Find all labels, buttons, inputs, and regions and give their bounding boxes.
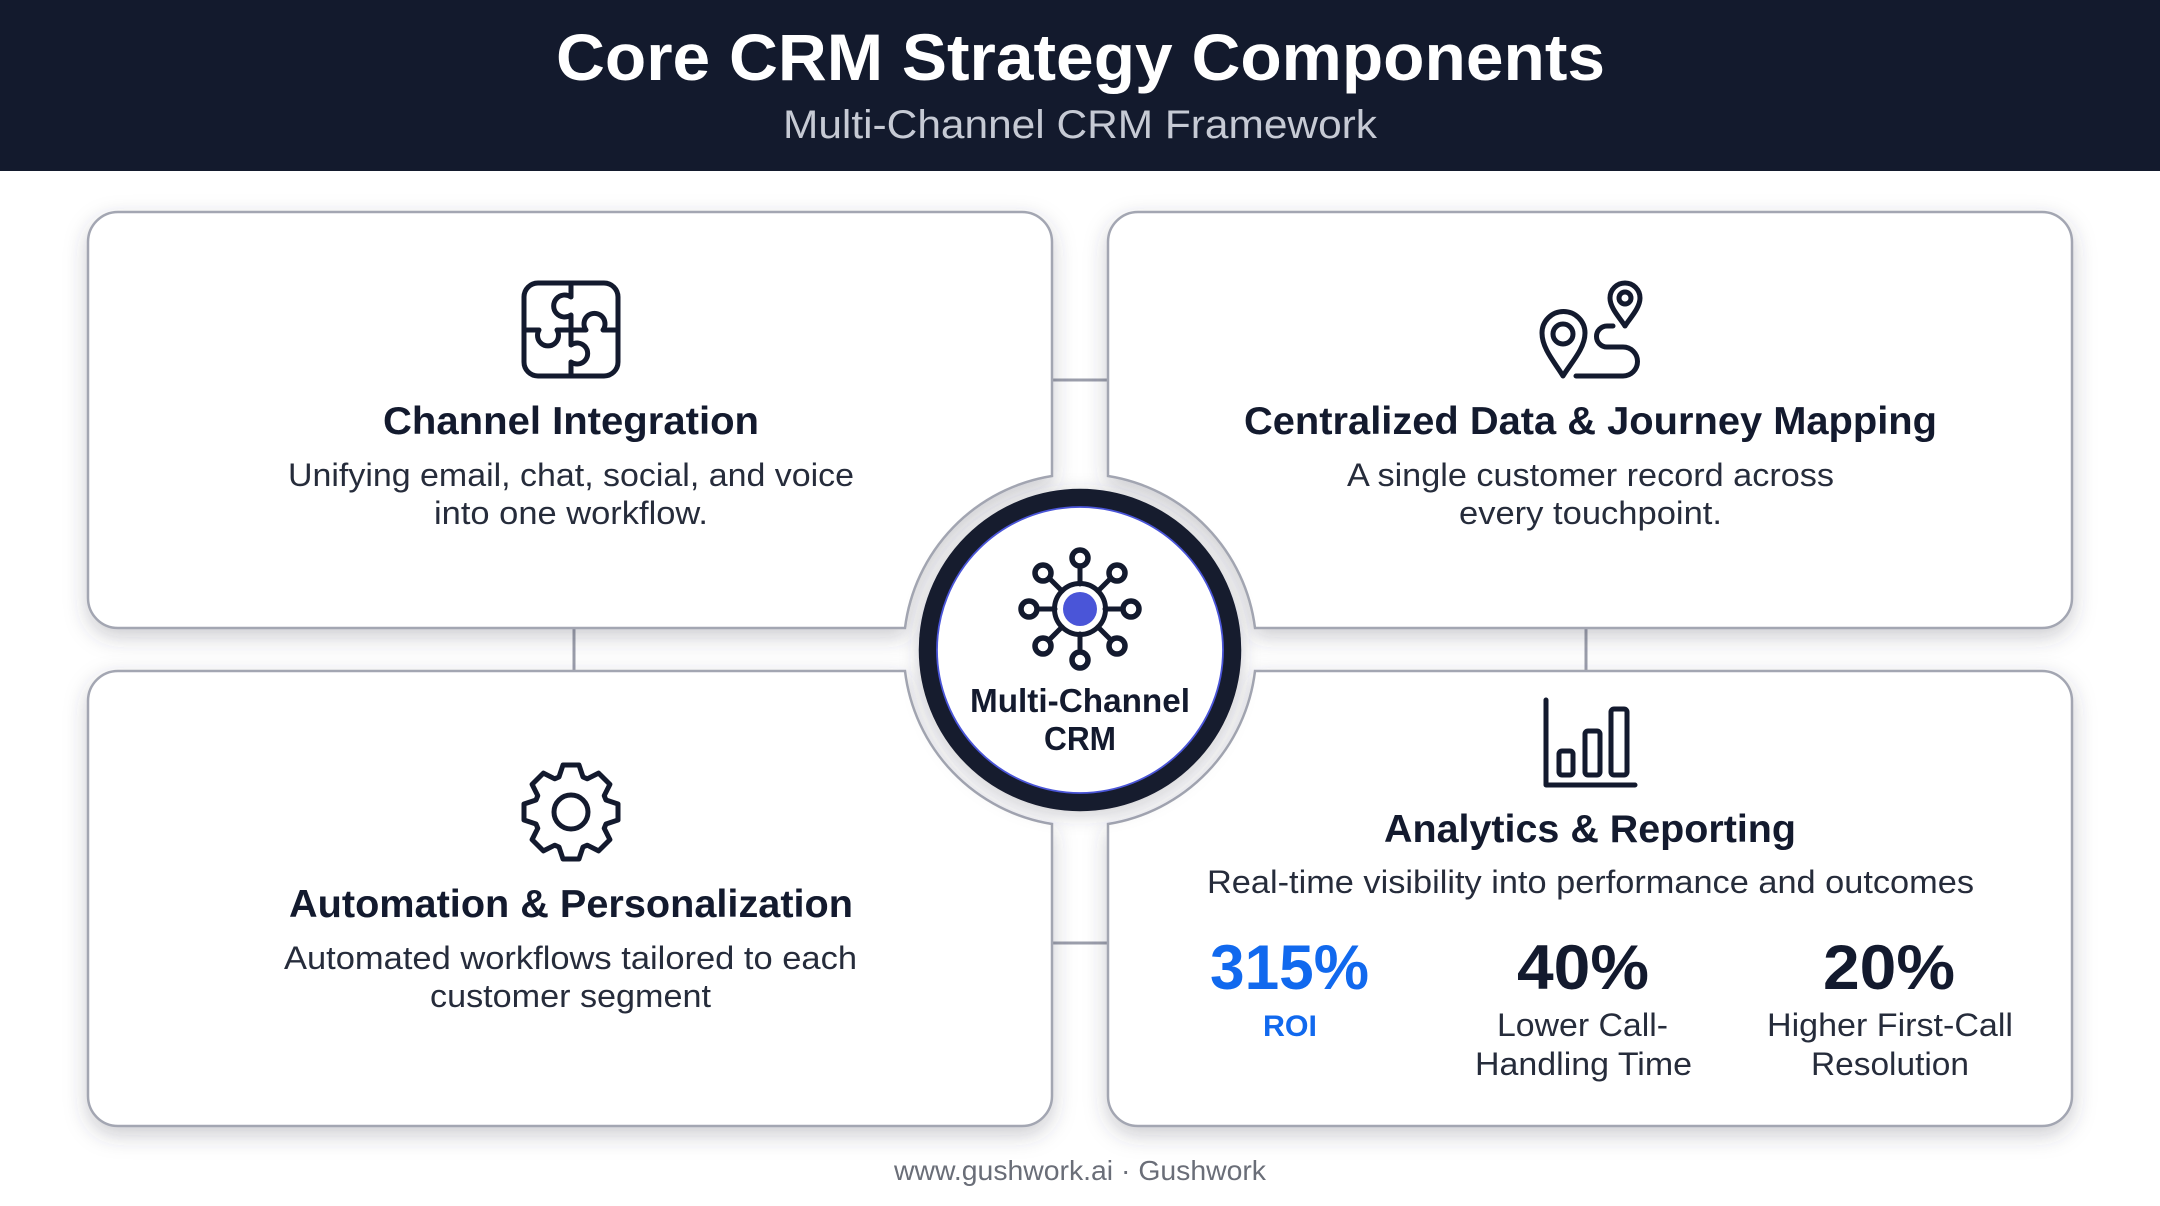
description: automation (284, 940, 857, 1014)
footer credit: www.gushwork.ai · Gushwork (893, 1155, 1267, 1186)
description: centralized data (1347, 457, 1834, 531)
panel: automation and personalization (88, 671, 1052, 1126)
heading: channel integration: Channel Integration (383, 400, 759, 443)
icon: map pins and route (1542, 283, 1640, 376)
stat: 20% higher first-call resolution (1767, 933, 2013, 1082)
hub label (970, 682, 1190, 757)
header banner (0, 0, 2160, 171)
hub label: Multi-Channel (970, 682, 1190, 719)
description: automation: Automated workflows tailored to each (284, 940, 857, 976)
stat: 20% higher first-call resolution: 20% (1823, 933, 1955, 1003)
stat: 315% ROI (1210, 933, 1369, 1043)
icon: puzzle (524, 283, 618, 376)
description: channel integration: into one workflow. (434, 495, 708, 531)
icon: network hub (1021, 550, 1139, 668)
stat: 40% lower call-handling time: Handling Time (1475, 1046, 1692, 1082)
stat: 40% lower call-handling time (1475, 933, 1692, 1082)
stat: 40% lower call-handling time: 40% (1517, 933, 1649, 1003)
title: Core CRM Strategy Components (556, 20, 1605, 94)
heading: centralized data: Centralized Data & Journey Mapping (1244, 400, 1937, 443)
description: centralized data: every touchpoint. (1459, 495, 1722, 531)
description: channel integration (288, 457, 854, 531)
heading: automation: Automation & Personalization (289, 883, 853, 926)
hub label: CRM (1044, 720, 1116, 757)
stat: 20% higher first-call resolution: Higher First-Call (1767, 1007, 2013, 1043)
connector lines between panels (574, 380, 1586, 943)
subtitle: Multi-Channel CRM Framework (783, 103, 1378, 147)
icon: bar chart (1546, 700, 1635, 785)
stat: 20% higher first-call resolution: Resolution (1811, 1046, 1969, 1082)
stat: 40% lower call-handling time: Lower Call- (1497, 1007, 1668, 1043)
description: automation: customer segment (430, 978, 711, 1014)
description: analytics: Real-time visibility into performance and outcomes (1207, 864, 1974, 900)
stat: 315% ROI: ROI (1263, 1010, 1317, 1043)
panel: channel integration (88, 212, 1052, 628)
icon: gear (524, 765, 618, 859)
heading: analytics: Analytics & Reporting (1384, 808, 1796, 851)
panel: analytics and reporting (1108, 671, 2072, 1126)
panel: centralized data and journey mapping (1108, 212, 2072, 628)
description: channel integration: Unifying email, chat, social, and voice (288, 457, 854, 493)
description: centralized data: A single customer record across (1347, 457, 1834, 493)
stat: 315% ROI: 315% (1210, 933, 1369, 1003)
center hub: multi-channel CRM (928, 498, 1232, 802)
